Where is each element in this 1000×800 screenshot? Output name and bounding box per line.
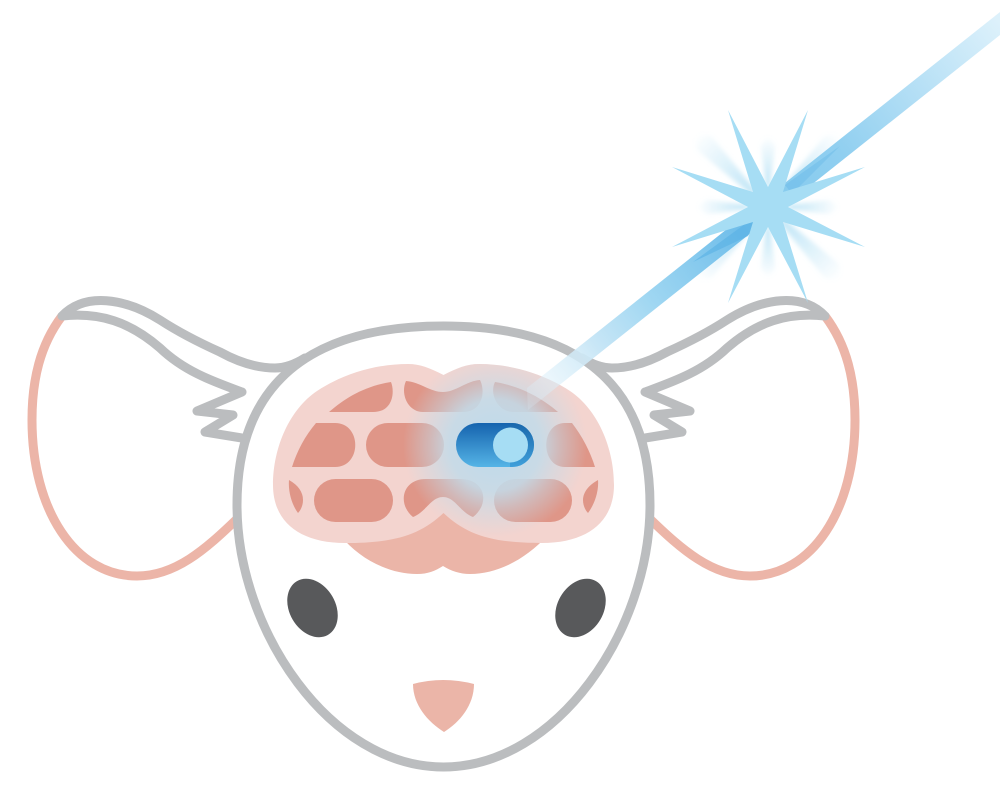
optogenetic toggle switch (456, 423, 534, 467)
brain cortex (273, 364, 614, 543)
beam dark wedge upper (785, 146, 840, 194)
toggle knob (493, 428, 528, 462)
starburst (672, 110, 865, 303)
right ear (582, 301, 855, 576)
cortex grid cells (289, 380, 598, 522)
toggle track (456, 423, 534, 467)
brain (273, 353, 614, 574)
brain lower lobes (340, 500, 548, 574)
right eye (545, 570, 616, 646)
left ear (32, 301, 305, 576)
mouse head (237, 326, 650, 767)
beam dark wedge lower (693, 213, 760, 262)
nose (413, 680, 474, 732)
right ear outer rim (649, 316, 855, 576)
laser beam (527, 12, 1000, 410)
left eye (277, 570, 348, 646)
left ear outer rim (32, 316, 238, 576)
left ear fold (62, 301, 305, 439)
soft light rays (691, 130, 845, 284)
right ear fold (582, 301, 825, 439)
light glow on brain (408, 364, 582, 528)
toggle track right side (510, 423, 534, 467)
